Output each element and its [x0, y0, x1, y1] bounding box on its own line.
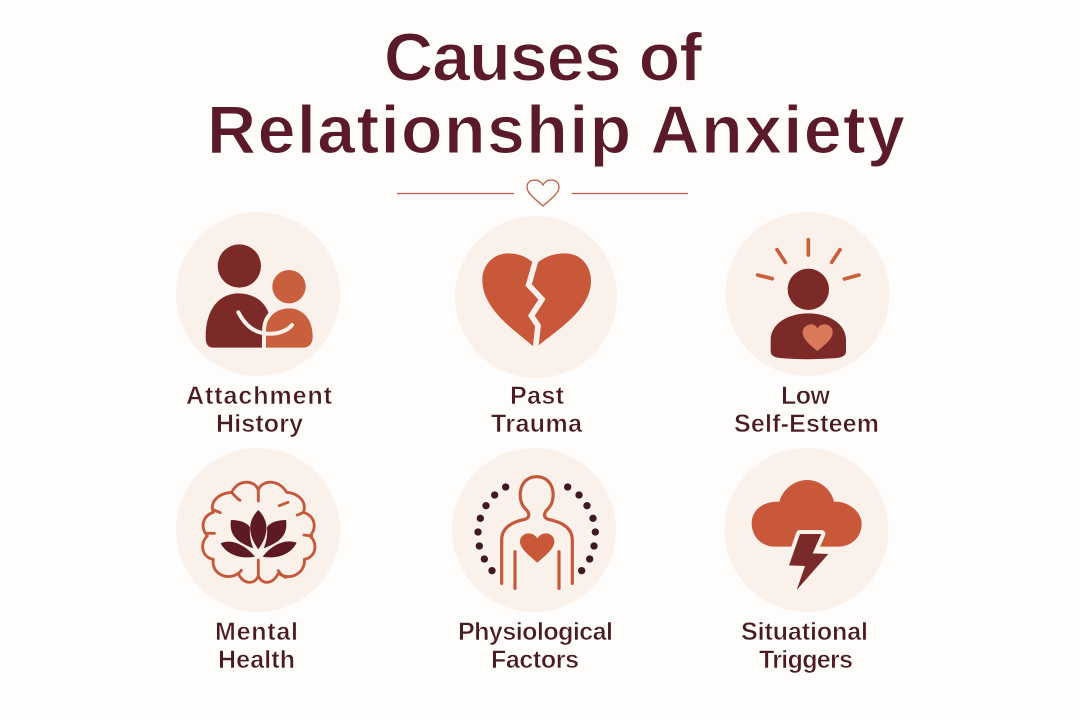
icon: broken heart: [455, 216, 617, 378]
label: [215, 618, 298, 674]
label: Mental: [215, 618, 298, 646]
panel: past trauma: [455, 216, 617, 438]
label: Trauma: [491, 410, 583, 438]
label: Attachment: [186, 382, 333, 410]
label: History: [216, 410, 303, 438]
panel: situational triggers: [724, 448, 888, 674]
label: [491, 382, 583, 438]
panel: attachment history: [176, 212, 340, 438]
label: Factors: [491, 646, 579, 674]
panel: mental health: [176, 448, 340, 674]
label: Physiological: [458, 618, 613, 646]
icon: brain with lotus: [176, 448, 340, 612]
title: Relationship Anxiety: [207, 92, 905, 168]
label: Past: [510, 382, 565, 410]
label: [734, 382, 879, 438]
label: Situational: [741, 618, 868, 646]
icon: person with heart and rays: [726, 212, 890, 376]
panel: physiological factors: [452, 448, 616, 674]
icon: storm cloud with lightning bolt: [724, 448, 888, 612]
icon: adult and child embracing: [176, 212, 340, 376]
label: Health: [218, 646, 295, 674]
label: [741, 618, 868, 674]
title: [207, 20, 905, 168]
panel: low self-esteem: [726, 212, 890, 438]
label: [458, 618, 613, 674]
label: Low: [781, 382, 831, 410]
label: Triggers: [759, 646, 853, 674]
heart divider: [397, 180, 688, 206]
label: Self-Esteem: [734, 410, 879, 438]
icon: body outline with heart and dots: [452, 448, 616, 612]
label: [186, 382, 333, 438]
title: Causes of: [384, 20, 702, 96]
